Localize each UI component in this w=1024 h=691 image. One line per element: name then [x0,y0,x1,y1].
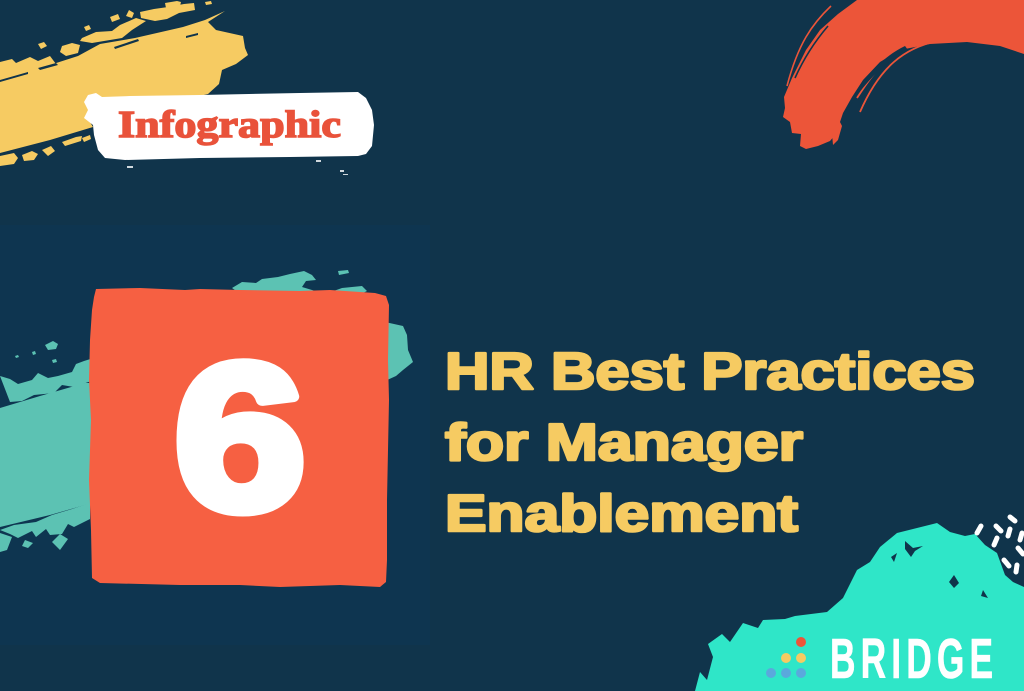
teal band [0,383,92,527]
inner dry strands [857,41,937,112]
Bridge logo [766,628,993,691]
headline line 3: Enablement [445,485,798,543]
teal right blob [385,322,413,381]
number card [89,288,389,587]
teal dry specks [0,341,100,552]
headline line 2: for Manager [445,414,803,472]
badge text: Infographic [118,104,341,146]
brush texture gaps [891,541,988,598]
logo dots [766,637,806,678]
outer dry strands [795,14,834,78]
white confetti marks [977,517,1023,572]
numeral 6: 6 [174,322,306,554]
headline line 1: HR Best Practices [445,343,975,401]
brush body [0,11,248,153]
red arc brush stroke [783,0,1024,149]
mint brush corner [695,523,1024,691]
teal top scraps [232,270,367,300]
headline [445,343,975,543]
dark nicks [0,33,198,82]
dark inner gap [845,46,908,112]
arc body [783,0,1024,149]
white specks [127,160,348,175]
teal brush stroke behind number [0,270,413,552]
orange square [89,288,389,587]
logo wordmark: BRIDGE [830,628,993,691]
white brush label [84,92,374,160]
badge: Infographic [84,92,374,175]
dry brush specks [0,1,212,166]
yellow brush stroke [0,1,248,166]
